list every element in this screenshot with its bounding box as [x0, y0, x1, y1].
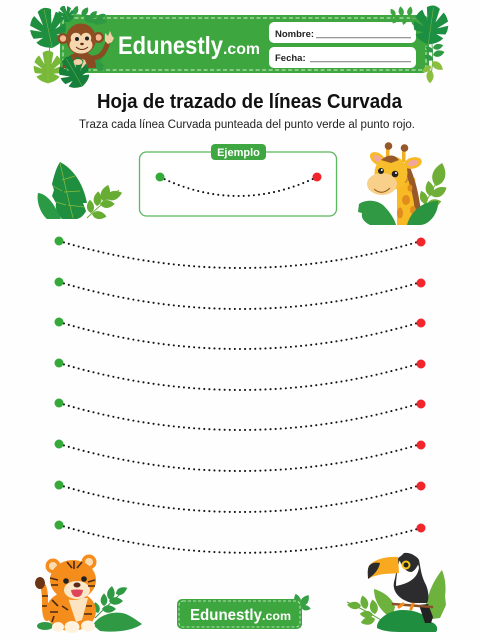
- icon: tiger: [35, 554, 142, 633]
- icon: monkey: [58, 24, 114, 68]
- line 1: [54, 236, 426, 268]
- line 3: [54, 318, 426, 349]
- name field: [269, 22, 416, 43]
- header right foliage: [388, 3, 451, 83]
- brand name: Edunestly: [118, 32, 223, 60]
- title: Hoja de trazado de líneas Curvada: [97, 91, 403, 113]
- line 8: [54, 520, 426, 553]
- footer logo: [177, 593, 312, 629]
- example panel: [140, 144, 336, 216]
- instructions: Traza cada línea Curvada punteada del punto verde al punto rojo.: [79, 119, 415, 131]
- header banner: [60, 15, 429, 73]
- line 5: [54, 398, 426, 430]
- icon: logo leaves: [292, 593, 312, 611]
- example dotted curve: [160, 177, 317, 196]
- example end dot: [312, 172, 322, 182]
- brand domain: .com: [223, 41, 260, 58]
- logo domain: .com: [262, 609, 291, 623]
- icon: toucan: [347, 553, 446, 632]
- line 6: [54, 440, 426, 471]
- line 4: [54, 358, 426, 390]
- icon: giraffe: [358, 142, 449, 225]
- example start dot: [156, 172, 164, 182]
- date field: [269, 47, 416, 68]
- header left foliage: [26, 3, 108, 83]
- icon: leaves left: [38, 162, 123, 220]
- tracing lines: [54, 236, 426, 553]
- logo name: Edunestly: [190, 607, 262, 624]
- line 2: [54, 278, 426, 309]
- example label: Ejemplo: [217, 147, 260, 159]
- name field: Nombre:: [275, 29, 314, 40]
- example label: [211, 144, 266, 160]
- header lower leaf and monkey hand: [53, 50, 95, 94]
- line 7: [54, 480, 426, 512]
- date field: Fecha:: [275, 53, 306, 64]
